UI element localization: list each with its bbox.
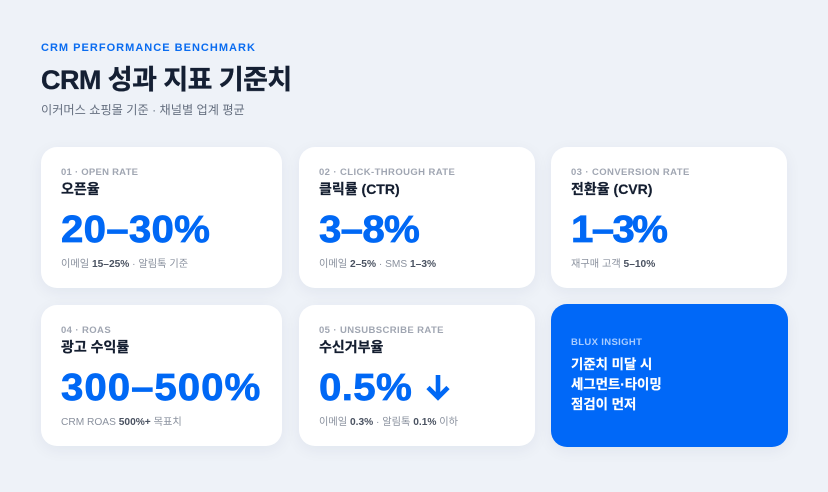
card note: 이메일 0.3% · 알림톡 0.1% 이하 bbox=[319, 417, 458, 428]
panel: open rate bbox=[41, 147, 282, 288]
callout text: 기준치 미달 시 bbox=[571, 357, 652, 372]
stat value: 3–8% bbox=[319, 209, 419, 251]
panel: ROAS bbox=[41, 305, 282, 446]
card label: 05 · UNSUBSCRIBE RATE bbox=[319, 325, 444, 336]
card heading: 전환율 (CVR) bbox=[571, 181, 652, 197]
subtitle: 이커머스 쇼핑몰 기준 · 채널별 업계 평균 bbox=[41, 103, 245, 117]
card note: CRM ROAS 500%+ 목표치 bbox=[61, 417, 182, 428]
callout text: 점검이 먼저 bbox=[571, 397, 636, 412]
panel: click-through rate bbox=[299, 147, 535, 288]
card heading: 수신거부율 bbox=[319, 339, 383, 355]
callout label: BLUX INSIGHT bbox=[571, 337, 642, 348]
card heading: 광고 수익률 bbox=[61, 339, 129, 355]
callout text: 세그먼트·타이밍 bbox=[571, 377, 662, 392]
title: CRM 성과 지표 기준치 bbox=[41, 65, 292, 95]
card note: 이메일 2–5% · SMS 1–3% bbox=[319, 259, 436, 270]
panel: BLUX insight callout bbox=[551, 304, 788, 447]
card label: 02 · CLICK-THROUGH RATE bbox=[319, 167, 455, 178]
stat value: 300–500% bbox=[61, 367, 261, 409]
panel: conversion rate bbox=[551, 147, 787, 288]
stat value: 0.5% bbox=[319, 367, 412, 409]
card heading: 오픈율 bbox=[61, 181, 100, 197]
stat value: 20–30% bbox=[61, 209, 210, 251]
panel: unsubscribe rate bbox=[299, 305, 535, 446]
stat value: 1–3% bbox=[571, 209, 666, 251]
eyebrow label: CRM PERFORMANCE BENCHMARK bbox=[41, 42, 256, 54]
card heading: 클릭률 (CTR) bbox=[319, 181, 400, 197]
card note: 이메일 15–25% · 알림톡 기준 bbox=[61, 259, 188, 270]
card label: 03 · CONVERSION RATE bbox=[571, 167, 690, 178]
icon: down arrow bbox=[426, 375, 450, 401]
card note: 재구매 고객 5–10% bbox=[571, 259, 655, 270]
card label: 01 · OPEN RATE bbox=[61, 167, 138, 178]
callout text bbox=[571, 357, 662, 412]
card label: 04 · ROAS bbox=[61, 325, 111, 336]
